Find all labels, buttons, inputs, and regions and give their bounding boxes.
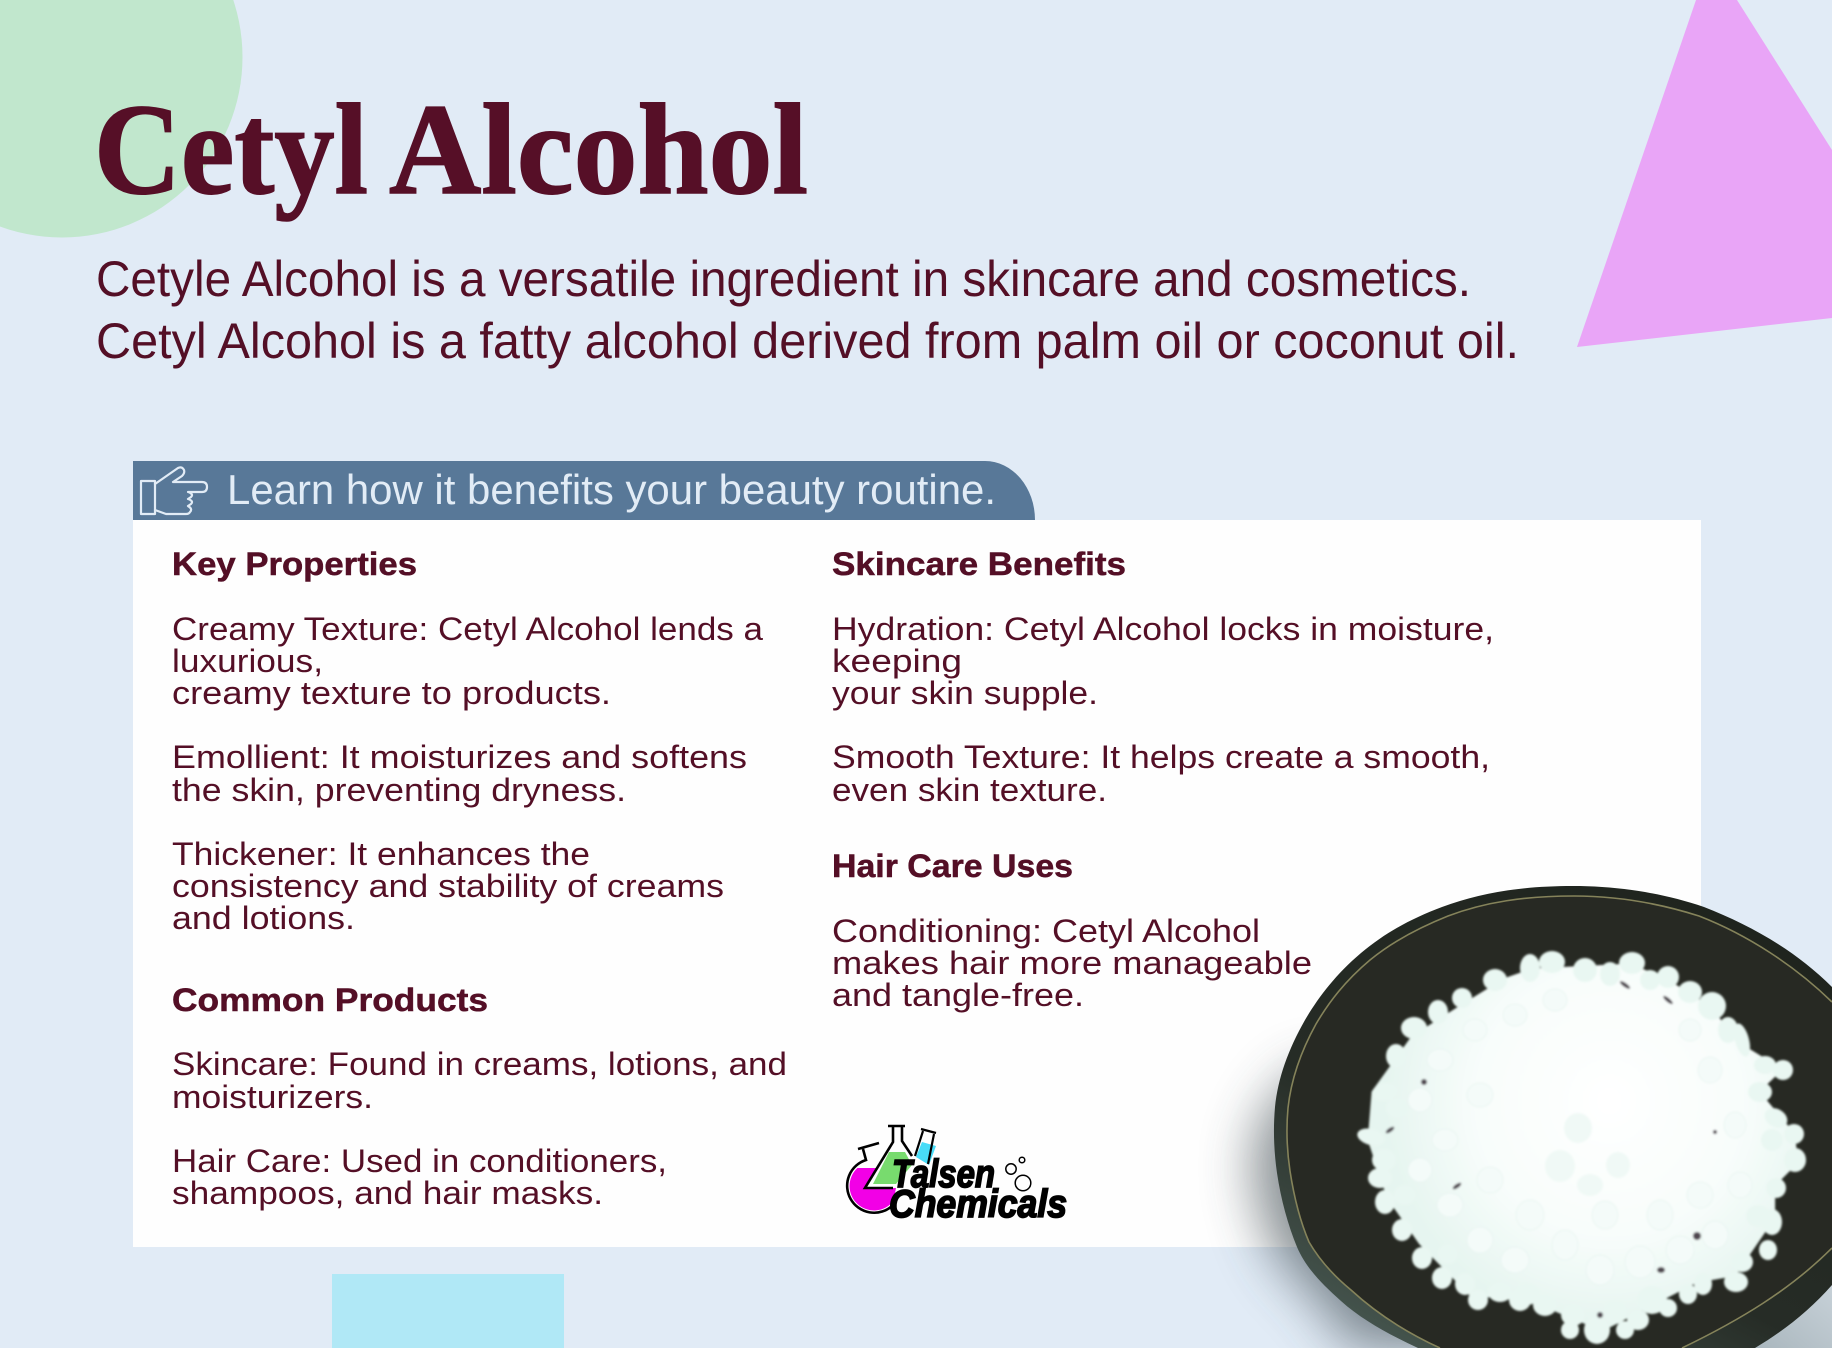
text: hair care products: [172, 1143, 667, 1211]
panel: content card: [133, 520, 1701, 1247]
logo wordmark: Talsen: [892, 1153, 995, 1196]
title: Cetyl: [94, 78, 368, 222]
heading: common products: Common Products: [172, 982, 488, 1018]
text: thickener: consistency and stability of creams: [172, 868, 724, 904]
icon: vial: [915, 1129, 936, 1165]
logo wordmark: Chemicals: [889, 1183, 1067, 1226]
text: conditioning: makes hair more manageable: [832, 945, 1312, 981]
bowl interior: [1287, 896, 1832, 1348]
decorative pink triangle: [1577, 0, 1832, 347]
text: thickener: Thickener: It enhances the: [172, 836, 590, 872]
bowl shadow: [1253, 1069, 1776, 1348]
text: hydration: [832, 611, 1494, 711]
decorative green circle: [0, 0, 242, 238]
bottom-right corner shading: [1750, 1280, 1832, 1348]
text: skincare products: moisturizers.: [172, 1079, 373, 1115]
text: hydration: your skin supple.: [832, 675, 1098, 711]
heading: hair care uses: Hair Care Uses: [832, 848, 1073, 884]
intro text: Cetyl Alcohol is a fatty alcohol derived from palm oil or coconut oil.: [96, 313, 1519, 369]
text: skincare products: Skincare: Found in creams, lotions, and: [172, 1046, 787, 1082]
banner background: [133, 461, 1035, 520]
text: hair care products: Hair Care: Used in conditioners,: [172, 1143, 667, 1179]
text: thickener: [172, 836, 724, 936]
icon: round flask: [847, 1143, 896, 1213]
section banner: [133, 461, 1035, 520]
text: conditioning: Conditioning: Cetyl Alcohol: [832, 913, 1260, 949]
icon: bubbles: [1006, 1157, 1031, 1191]
column: skincare benefits and hair care uses: [832, 546, 1494, 1013]
text: emollient: the skin, preventing dryness.: [172, 772, 626, 808]
photo: bowl of cetyl alcohol flakes: [1253, 886, 1832, 1348]
heading: key properties: Key Properties: [172, 546, 417, 582]
text: hydration: Hydration: Cetyl Alcohol locks in moisture,: [832, 611, 1494, 647]
text: creamy texture: creamy texture to products.: [172, 675, 611, 711]
decorative blue rectangle: [332, 1274, 564, 1348]
text: creamy texture: Creamy Texture: Cetyl Alcohol lends a: [172, 611, 763, 647]
text: smooth texture: Smooth Texture: It helps create a smooth,: [832, 739, 1490, 775]
text: smooth texture: even skin texture.: [832, 772, 1107, 808]
logo: Talsen Chemicals: [847, 1126, 1067, 1226]
intro text: [96, 251, 1519, 369]
text: skincare products: [172, 1046, 787, 1115]
text: hydration: keeping: [832, 643, 962, 679]
column: key properties and common products: [172, 546, 787, 1211]
intro text: Cetyle Alcohol is a versatile ingredient in skincare and cosmetics.: [96, 251, 1471, 307]
bowl gold rim line: [1287, 896, 1832, 1348]
text: conditioning: and tangle-free.: [832, 977, 1084, 1013]
bowl rim: [1274, 886, 1832, 1348]
text: emollient: Emollient: It moisturizes and softens: [172, 739, 747, 775]
text: creamy texture: [172, 611, 763, 711]
banner text: Learn how it benefits your beauty routine.: [227, 466, 996, 513]
heading: skincare benefits: Skincare Benefits: [832, 546, 1126, 582]
text: smooth texture: [832, 739, 1490, 808]
title: [94, 78, 808, 222]
icon: erlenmeyer flask: [865, 1126, 912, 1188]
flakes pile: [1355, 951, 1806, 1344]
text: conditioning: [832, 913, 1312, 1013]
text: emollient: [172, 739, 747, 808]
logo wordmark: [889, 1153, 1067, 1226]
text: thickener: and lotions.: [172, 900, 355, 936]
title: Alcohol: [389, 78, 808, 222]
text: hair care products: shampoos, and hair masks.: [172, 1175, 603, 1211]
icon: pointing hand: [141, 467, 207, 514]
text: creamy texture: luxurious,: [172, 643, 323, 679]
